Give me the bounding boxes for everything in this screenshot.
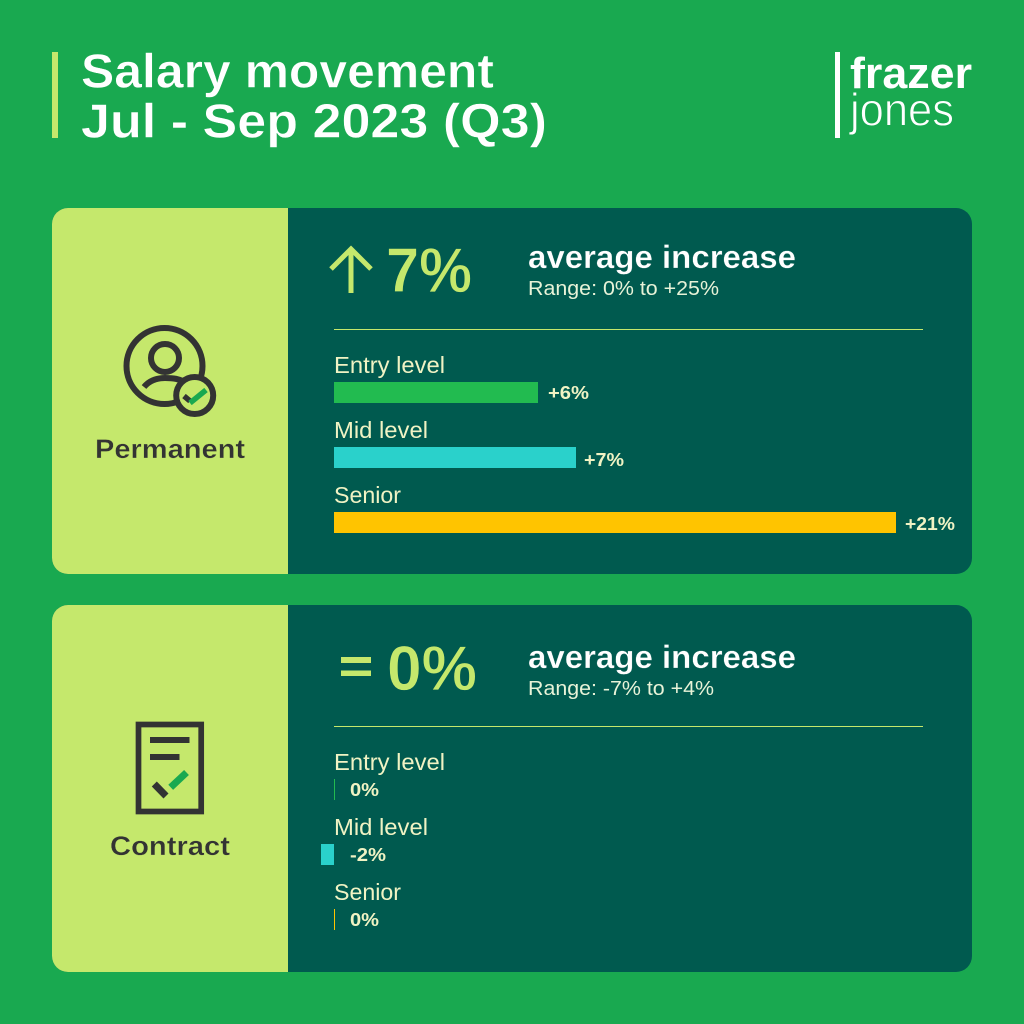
bar chart: permanent levels <box>334 352 955 534</box>
row: mid level -2%: Mid level <box>334 814 428 840</box>
row: mid level +7% <box>334 417 624 470</box>
panel: contract <box>52 605 972 972</box>
row: entry level +6% <box>334 352 589 403</box>
row: senior +21%: +21% <box>905 514 955 534</box>
row: senior +21%: Senior <box>334 482 401 508</box>
stat: 0%: 0% <box>387 634 477 704</box>
bar chart: contract levels <box>321 749 445 930</box>
heading: average increase: average increase <box>528 639 796 675</box>
logo: frazer jones: frazer <box>850 49 972 98</box>
icon: person with check badge <box>126 328 213 414</box>
icon: contract document <box>138 724 201 812</box>
icon: up arrow <box>331 249 371 293</box>
heading: average increase: average increase <box>528 239 796 275</box>
row: entry level +6%: +6% <box>548 383 589 403</box>
panel: permanent <box>52 208 972 574</box>
row: senior 0%: Senior <box>334 879 401 905</box>
label: Permanent: Permanent <box>95 434 245 464</box>
title block: Salary movement <box>81 46 494 98</box>
row: senior +21% <box>334 482 955 534</box>
row: entry level 0%: 0% <box>350 780 379 800</box>
row: mid level -2% <box>321 814 428 865</box>
row: entry level +6%: Entry level <box>334 352 445 378</box>
row: mid level -2%: -2% <box>350 845 386 865</box>
row: senior 0% <box>334 879 401 930</box>
row: entry level 0% <box>334 749 445 800</box>
logo: frazer jones <box>835 49 972 138</box>
title block <box>52 46 547 148</box>
title block: Jul - Sep 2023 (Q3) <box>81 96 547 148</box>
stat: 7%: 7% <box>386 236 472 306</box>
row: mid level +7%: +7% <box>584 450 624 470</box>
logo: frazer jones: jones <box>848 84 954 136</box>
row: mid level +7%: Mid level <box>334 417 428 443</box>
label: Contract: Contract <box>110 831 230 861</box>
range text: Range: -7% to +4% <box>528 678 714 700</box>
icon: equals sign <box>341 657 371 676</box>
row: senior 0%: 0% <box>350 910 379 930</box>
range text: Range: 0% to +25% <box>528 278 719 300</box>
row: entry level 0%: Entry level <box>334 749 445 775</box>
